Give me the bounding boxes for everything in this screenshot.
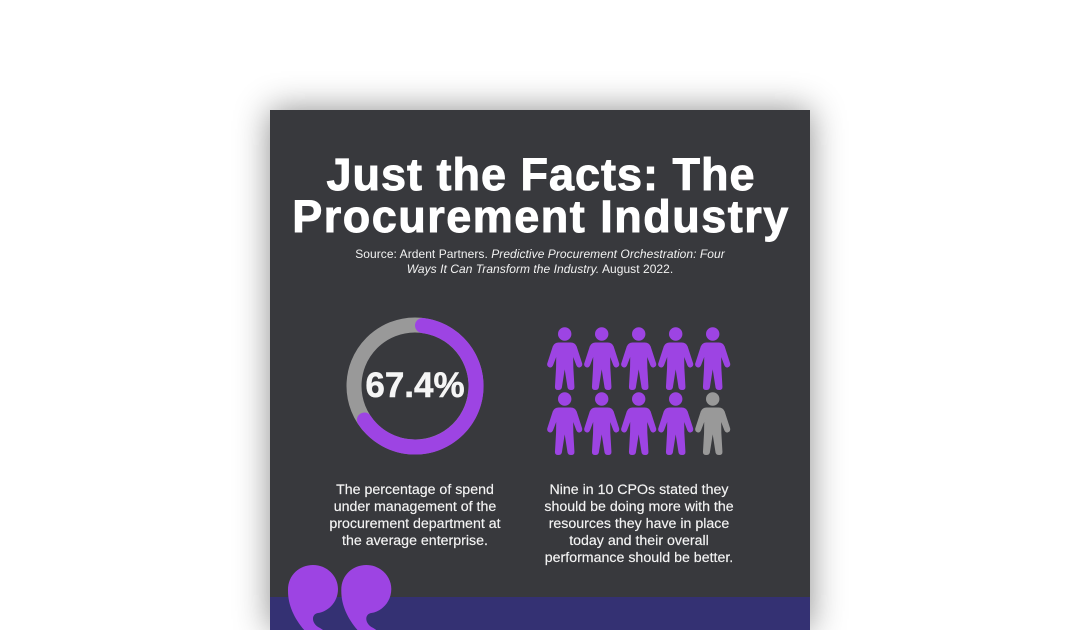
title: Procurement Industry <box>292 191 790 242</box>
caption: CPOs: Nine in 10 CPOs stated they <box>549 482 728 498</box>
caption: spend under management: procurement department at <box>329 516 501 532</box>
panel: infographic card <box>270 110 810 630</box>
caption: CPOs: today and their overall <box>569 533 709 549</box>
title <box>292 149 790 242</box>
caption: CPOs: should be doing more with the <box>544 499 734 515</box>
title: Just the Facts: The <box>326 149 756 200</box>
donut chart: 67.4%: 67.4% <box>365 366 465 405</box>
footer band <box>270 597 810 630</box>
caption: CPOs <box>544 482 734 566</box>
caption: spend under management <box>329 482 501 549</box>
donut chart: 67.4% <box>354 325 476 447</box>
source text: Source: Ardent Partners. Predictive Procurement Orchestration: Four <box>355 247 725 261</box>
icon group: nine in ten people <box>548 327 730 455</box>
caption: CPOs: performance should be better. <box>545 550 733 566</box>
icon: quotation marks <box>288 565 391 630</box>
source text <box>355 247 726 276</box>
caption: spend under management: The percentage of spend <box>336 482 494 498</box>
source text: Ways It Can Transform the Industry. August 2022. <box>407 262 673 276</box>
caption: spend under management: under management of the <box>334 499 496 515</box>
caption: spend under management: the average enterprise. <box>342 533 488 549</box>
caption: CPOs: resources they have in place <box>549 516 729 532</box>
